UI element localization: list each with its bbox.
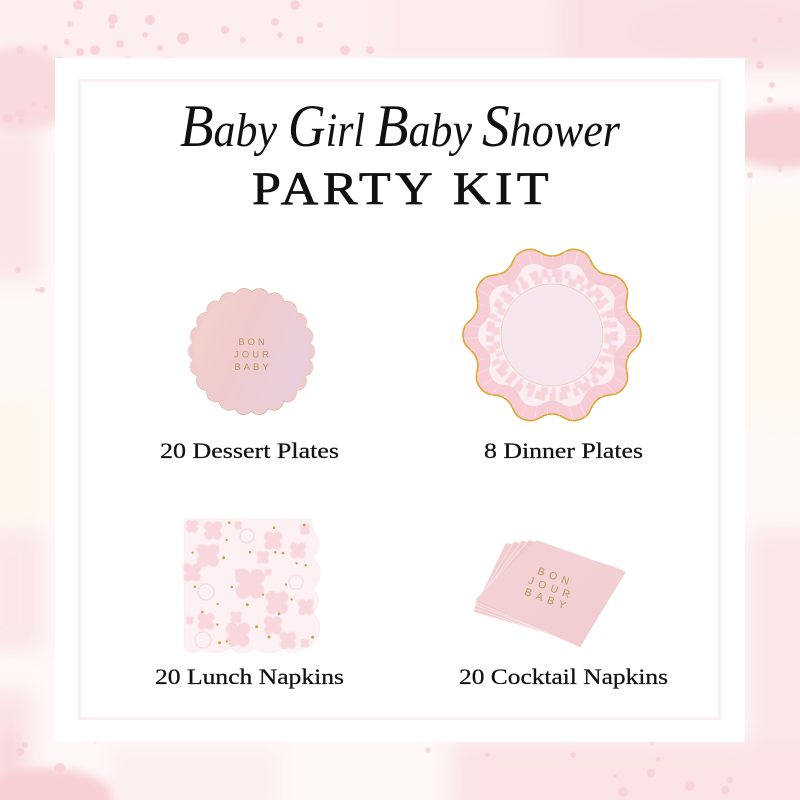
title: script line: Baby [375,93,473,159]
panel: white card [55,58,745,742]
napkin text [523,563,581,614]
icon: wavy dinner plate [463,249,641,421]
label: dessert plates: 20 Dessert Plates [160,438,339,463]
label: lunch napkins: 20 Lunch Napkins [155,664,344,689]
title: script line: Shower [482,93,620,159]
label: dinner plates: 8 Dinner Plates [484,438,643,463]
napkin text: BON [536,565,575,589]
title: script line [180,93,620,159]
napkin text: JOUR [527,575,576,603]
plate text: JOUR [234,350,272,360]
plate text: BABY [234,362,272,373]
icon: scalloped dessert plate [194,294,310,410]
plate text [234,337,272,373]
label: cocktail napkins: 20 Cocktail Napkins [459,664,668,689]
title: script line: Baby [180,93,278,159]
item: lunch napkin [155,519,344,689]
panel: inner frame [80,80,720,718]
icon: floral scalloped napkin [183,519,320,653]
item: cocktail napkins [459,540,668,689]
plate text: BON [238,337,268,348]
title: script line: Girl [288,93,365,159]
icon: stacked cocktail napkins [473,540,626,647]
item: dessert plate [160,294,339,463]
title: party kit: PARTY KIT [252,163,553,215]
item: dinner plate [463,249,643,463]
napkin text: BABY [523,586,572,614]
